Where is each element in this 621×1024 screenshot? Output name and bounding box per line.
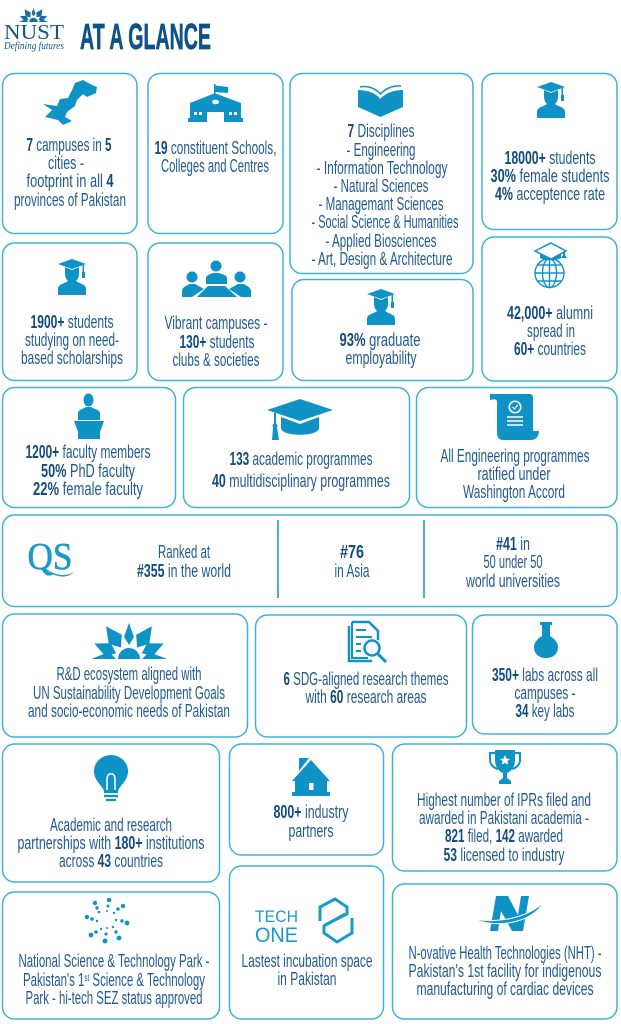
- panel: scholarships: [2, 243, 137, 380]
- text: science park: Science & Technology: [89, 969, 205, 990]
- icon: trophy: [490, 750, 520, 784]
- icon: student: [537, 82, 565, 118]
- text: labs: 34 key labs: [516, 700, 574, 721]
- text: programmes: 40 multidisciplinary programmes: [212, 470, 390, 491]
- text: campuses: [14, 134, 126, 210]
- logo: QS: QS: [28, 536, 72, 578]
- header logo: NUST: Defining futures: [3, 41, 64, 52]
- text: students: 18000+ students: [504, 147, 596, 168]
- text: disciplines: [312, 120, 458, 269]
- icon: document with magnifier: [349, 622, 386, 662]
- text: schools: 19 constituent Schools,: [154, 137, 276, 158]
- text: disciplines: - Art, Design & Architecture: [312, 248, 452, 269]
- text: campuses: 7 campuses in 5: [26, 134, 112, 155]
- text: faculty: 22% female faculty: [33, 478, 144, 499]
- text: QS rankings: [137, 533, 560, 591]
- text: QS rankings: #76: [340, 541, 364, 562]
- text: R&D ecosystem: UN Sustainability Development Goals: [33, 682, 225, 703]
- text: labs: campuses -: [514, 682, 576, 703]
- text: science park: st: [84, 973, 89, 984]
- panel: disciplines: [290, 74, 473, 274]
- text: programmes: 133 academic programmes: [230, 448, 372, 469]
- panel: campuses: [2, 74, 137, 234]
- text: science park: Park - hi-tech SEZ status approved: [26, 987, 202, 1008]
- panel: NHT: [392, 884, 617, 1019]
- text: clubs: [164, 312, 268, 370]
- text: faculty: [26, 441, 150, 499]
- text: clubs: Vibrant campuses -: [164, 312, 268, 333]
- panel: R&D ecosystem: [2, 614, 248, 737]
- text: campuses: footprint in all 4: [26, 170, 114, 191]
- logo: Tech One: [255, 899, 352, 947]
- icon: Pakistan map: [43, 80, 97, 125]
- text: partnerships: partnerships with 180+ institutions: [18, 832, 204, 853]
- text: scholarships: studying on need-: [25, 329, 119, 350]
- text: QS rankings: in Asia: [334, 560, 370, 581]
- text: research themes: 6 SDG-aligned research themes: [284, 668, 448, 689]
- text: scholarships: based scholarships: [21, 347, 123, 368]
- icon: open book: [358, 86, 403, 117]
- text: clubs: clubs & societies: [172, 349, 260, 370]
- text: NHT: [408, 942, 602, 999]
- text: incubation: [242, 950, 372, 989]
- text: students: [490, 147, 610, 204]
- panel: incubation: [230, 866, 384, 1019]
- text: disciplines: - Natural Sciences: [334, 175, 428, 196]
- icon: globe with cap: [535, 243, 567, 288]
- text: science park: National Science & Technology Park -: [18, 950, 210, 971]
- text: clubs: 130+ students: [180, 331, 254, 352]
- icon: flask: [534, 622, 558, 658]
- icon: sunburst: [91, 622, 167, 660]
- text: Washington Accord: ratified under: [478, 463, 550, 484]
- text: research themes: [284, 668, 448, 707]
- text: Washington Accord: [440, 445, 590, 502]
- logo: Tech One: ONE: [255, 924, 298, 947]
- text: faculty: 1200+ faculty members: [26, 441, 150, 462]
- panel: students: [482, 74, 617, 230]
- text: campuses: provinces of Pakistan: [14, 189, 126, 210]
- header logo: NUST: [3, 7, 64, 52]
- text: IPRs: 53 licensed to industry: [444, 844, 565, 865]
- panel: schools: [148, 74, 283, 234]
- header logo: NUST: NUST: [4, 20, 64, 44]
- panel: industry partners: [230, 744, 384, 855]
- text: QS rankings: #41 in: [496, 533, 530, 554]
- panel: alumni: [482, 237, 617, 381]
- text: alumni: [507, 302, 593, 359]
- icon: house: [292, 758, 330, 796]
- icon: student: [367, 289, 395, 325]
- text: R&D ecosystem: and socio-economic needs of Pakistan: [28, 700, 230, 721]
- logo: Tech One: TECH: [255, 907, 298, 926]
- text: incubation: in Pakistan: [278, 968, 336, 989]
- panel: employability: [292, 280, 473, 380]
- text: research themes: with 60 research areas: [305, 686, 426, 707]
- icon: meeting table: [182, 260, 251, 297]
- text: alumni: 60+ countries: [514, 338, 586, 359]
- text: employability: employability: [346, 347, 417, 368]
- text: disciplines: - Applied Biosciences: [326, 230, 436, 251]
- icon: dot burst: [85, 898, 129, 944]
- text: alumni: spread in: [527, 320, 575, 341]
- icon: speaker at podium: [74, 394, 104, 439]
- text: disciplines: - Engineering: [346, 139, 416, 160]
- panel: QS rankings: [2, 515, 617, 606]
- icon: certificate scroll: [490, 394, 539, 440]
- text: alumni: 42,000+ alumni: [507, 302, 593, 323]
- title: AT A GLANCE: [80, 16, 211, 57]
- text: programmes: [212, 448, 390, 491]
- text: industry partners: partners: [288, 820, 334, 841]
- text: IPRs: 821 filed, 142 awarded: [445, 825, 563, 846]
- text: partnerships: Academic and research: [50, 814, 172, 835]
- text: schools: [154, 137, 276, 176]
- text: labs: [492, 664, 598, 721]
- text: QS rankings: 50 under 50: [484, 551, 542, 572]
- text: disciplines: - Information Technology: [316, 157, 448, 178]
- panel: IPRs: [392, 744, 617, 871]
- text: scholarships: 1900+ students: [30, 311, 114, 332]
- text: partnerships: [18, 814, 204, 871]
- logo: N-ovative: [473, 896, 544, 931]
- icon: student: [58, 259, 86, 295]
- text: scholarships: [21, 311, 123, 368]
- panel: Washington Accord: [416, 388, 617, 508]
- text: disciplines: - Managemant Sciences: [318, 193, 444, 214]
- text: QS rankings: #355 in the world: [137, 560, 231, 581]
- text: schools: Colleges and Centres: [161, 155, 269, 176]
- text: disciplines: 7 Disciplines: [348, 120, 414, 141]
- panel: partnerships: [2, 744, 220, 882]
- text: QS rankings: Ranked at: [158, 541, 210, 562]
- icon: light bulb: [94, 755, 128, 800]
- text: industry partners: 800+ industry: [274, 801, 349, 822]
- text: incubation: Lastest incubation space: [242, 950, 372, 971]
- panel: research themes: [256, 615, 466, 737]
- text: campuses: cities -: [48, 152, 84, 173]
- panel: labs: [472, 615, 617, 734]
- text: IPRs: [417, 789, 591, 865]
- text: science park: Pakistan's 1: [23, 969, 122, 990]
- text: QS rankings: world universities: [465, 570, 560, 591]
- text: employability: [340, 329, 420, 368]
- text: R&D ecosystem: [28, 663, 230, 721]
- text: R&D ecosystem: R&D ecosystem aligned with: [56, 663, 202, 684]
- panel: clubs: [148, 243, 283, 380]
- text: employability: 93% graduate: [340, 329, 420, 350]
- panel: faculty: [2, 388, 176, 508]
- panel: programmes: [184, 388, 410, 508]
- icon: school building: [188, 84, 243, 122]
- text: faculty: 50% PhD faculty: [41, 460, 136, 481]
- text: industry partners: [274, 801, 349, 841]
- text: partnerships: across 43 countries: [59, 850, 163, 871]
- text: science park: [18, 950, 210, 1008]
- panel: science park: [2, 892, 220, 1019]
- text: Washington Accord: Washington Accord: [463, 481, 565, 502]
- text: disciplines: - Social Science & Humanities: [312, 211, 458, 232]
- icon: graduation cap: [267, 399, 333, 440]
